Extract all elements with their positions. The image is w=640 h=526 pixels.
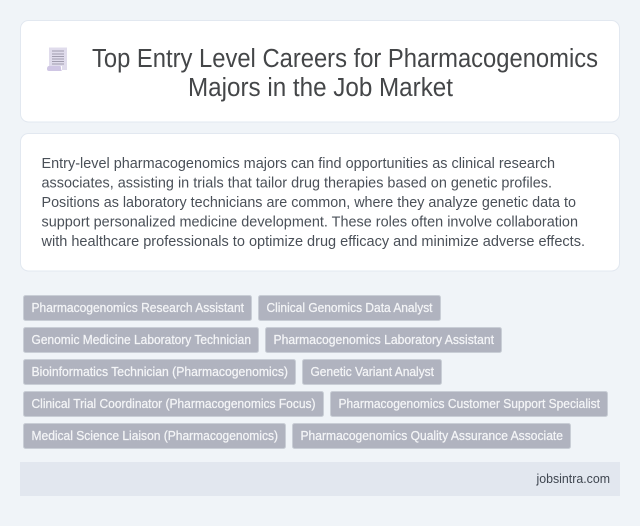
tag: Bioinformatics Technician: Bioinformatics Technician (Pharmacogenomics) — [32, 365, 288, 379]
panel: career tags — [24, 296, 608, 448]
tag: Pharmacogenomics Quality Assurance Associate: Pharmacogenomics Quality Assurance Associate — [300, 429, 563, 443]
tag: Pharmacogenomics Laboratory Assistant — [266, 328, 502, 352]
heading — [92, 45, 598, 102]
text block: description: with healthcare professionals to optimize drug efficacy and minimize adverse effects. — [41, 234, 585, 250]
tag: Genomic Medicine Laboratory Technician: Genomic Medicine Laboratory Technician — [32, 333, 251, 347]
panel: footer — [20, 462, 620, 496]
tag: Genetic Variant Analyst — [302, 360, 442, 384]
tag: Genetic Variant Analyst: Genetic Variant Analyst — [310, 365, 434, 379]
panel: title card — [20, 20, 620, 122]
heading: Majors in the Job Market — [188, 74, 453, 102]
tag: Clinical Trial Coordinator: Clinical Trial Coordinator (Pharmacogenomics Focus) — [32, 397, 316, 411]
tag: Medical Science Liaison — [24, 424, 286, 448]
tag: Pharmacogenomics Customer Support Specialist — [330, 392, 608, 416]
tag: Pharmacogenomics Research Assistant — [24, 296, 252, 320]
tag: Clinical Genomics Data Analyst — [258, 296, 440, 320]
heading: Top Entry Level Careers for Pharmacogenomics — [92, 45, 598, 73]
tag: Clinical Trial Coordinator — [24, 392, 324, 416]
text block: description: support personalized medicine development. These roles often involve collaboration — [42, 214, 578, 230]
tag: Medical Science Liaison: Medical Science Liaison (Pharmacogenomics) — [32, 429, 278, 443]
text block: description: Entry-level pharmacogenomics majors can find opportunities as clinical research — [42, 156, 555, 172]
tag: Pharmacogenomics Quality Assurance Associate — [292, 424, 570, 448]
tag: Bioinformatics Technician — [24, 360, 296, 384]
tag: Clinical Genomics Data Analyst: Clinical Genomics Data Analyst — [266, 301, 433, 315]
tag: Pharmacogenomics Research Assistant: Pharmacogenomics Research Assistant — [32, 301, 245, 315]
tag: Pharmacogenomics Laboratory Assistant: Pharmacogenomics Laboratory Assistant — [274, 333, 495, 347]
footer text: source: jobsintra.com — [536, 472, 610, 486]
text block: description: associates, assisting in trials that tailor drug therapies based on genetic profiles. — [42, 176, 552, 192]
icon: scroll document — [47, 48, 67, 71]
text block: description: Positions as laboratory technicians are common, where they analyze genetic data to — [42, 195, 576, 211]
tag: Pharmacogenomics Customer Support Specialist: Pharmacogenomics Customer Support Specialist — [338, 397, 600, 411]
panel: description — [20, 134, 620, 271]
tag: Genomic Medicine Laboratory Technician — [24, 328, 258, 352]
text block: description — [41, 156, 585, 250]
